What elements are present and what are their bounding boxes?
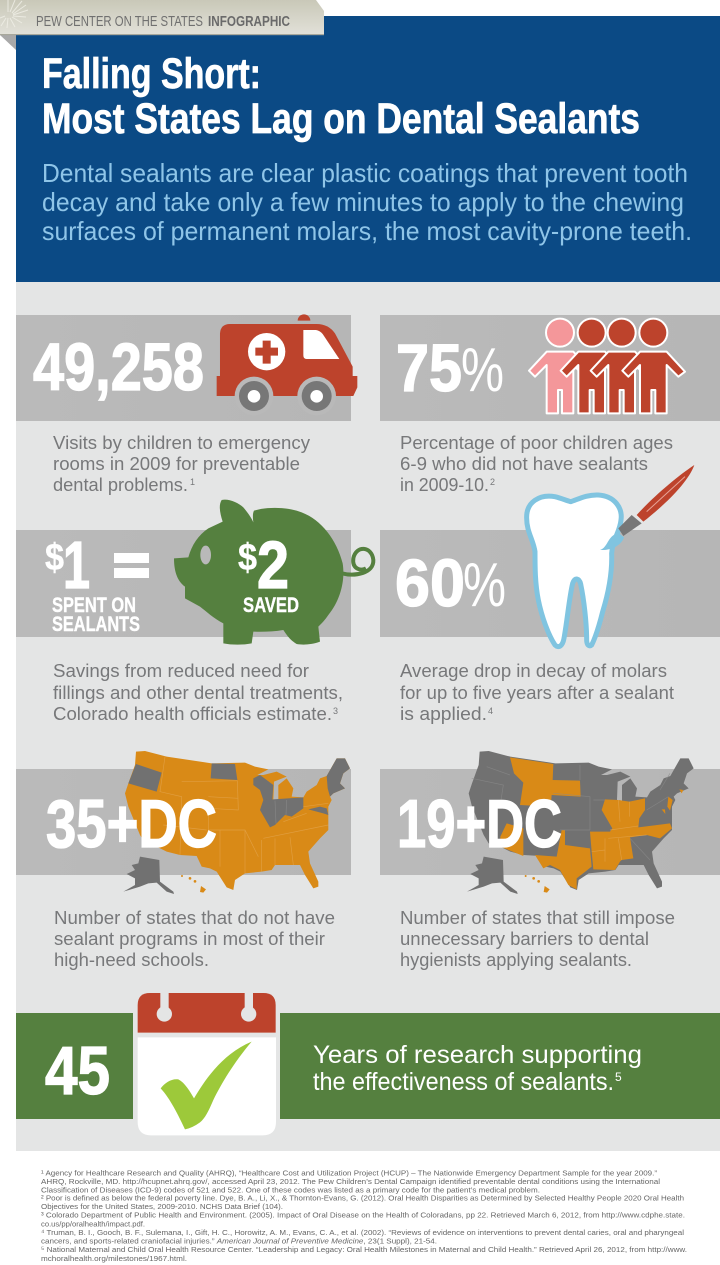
description: fillings and other dental treatments, <box>53 682 343 703</box>
stat: $1 =: SEALANTS <box>52 613 140 636</box>
statement: the effectiveness of sealants. <box>313 1068 614 1096</box>
icon: tooth and brush <box>527 465 694 647</box>
description: 3 <box>333 706 338 716</box>
stat: 49,258: 49,258 <box>33 330 204 405</box>
stat: 75%: % <box>461 336 504 405</box>
panel: decay drop <box>380 465 720 724</box>
stat: $2 saved <box>238 528 299 617</box>
grey content panel <box>16 282 720 1151</box>
panel: hygienist barriers map <box>380 751 720 970</box>
statement: 5 <box>615 1070 622 1084</box>
description: Percentage of poor children ages <box>400 432 673 453</box>
stat: 35+DC: 35+DC <box>46 786 217 862</box>
title <box>42 50 640 143</box>
description: Number of states that still impose <box>400 907 675 928</box>
footnotes <box>41 1168 687 1263</box>
icon: piggy bank <box>174 500 373 645</box>
description: unnecessary barriers to dental <box>400 928 649 949</box>
ribbon label: PEW CENTER ON THE STATES <box>36 14 203 30</box>
panel: savings <box>16 500 373 724</box>
title: Falling Short: <box>42 50 261 98</box>
stat: 75%: 75 <box>396 331 462 406</box>
description: 2 <box>490 477 495 487</box>
description: Number of states that do not have <box>54 907 335 928</box>
description: 4 <box>488 706 493 716</box>
footnotes: ³ Colorado Department of Public Health and Environment. (2005). Impact of Oral Disease on the Health of Coloradans, pp 22. Retrieved March 6, 2012, from http://www.cdphe.state. <box>41 1210 685 1220</box>
description <box>400 660 674 724</box>
description: Colorado health officials estimate. <box>53 703 332 724</box>
footnotes: AHRQ, Rockville, MD. http://hcupnet.ahrq.gov/, accessed April 23, 2012. The Pew Children’s Dental Campaign identified preventable dental conditions using the International <box>41 1177 660 1186</box>
intro text <box>42 158 692 246</box>
description <box>54 907 335 970</box>
description <box>53 660 343 724</box>
panel: years of research <box>16 993 720 1135</box>
footnotes: cancers, and sports-related craniofacial injuries.” American Journal of Preventive Medicine , 23(1 Suppl), 21-54. <box>41 1236 437 1246</box>
ribbon header <box>0 0 324 50</box>
stat: $2 saved: 2 <box>257 528 289 603</box>
stat: 19+DC: 19+DC <box>397 786 562 862</box>
description: in 2009-10. <box>400 474 489 495</box>
intro text: decay and take only a few minutes to apply to the chewing <box>42 187 684 217</box>
description: 1 <box>190 477 195 487</box>
stat: $2 saved: $ <box>238 537 257 579</box>
description: Savings from reduced need for <box>53 660 309 681</box>
description <box>400 907 675 970</box>
description: Visits by children to emergency <box>53 432 311 453</box>
stat: 60%: 60 <box>395 546 465 621</box>
description: is applied. <box>400 703 487 724</box>
stat: $1 =: $ <box>45 537 64 579</box>
panel: emergency visits <box>16 314 357 495</box>
description: sealant programs in most of their <box>54 928 325 949</box>
footnotes: ⁴ Truman, B. I., Gooch, B. F., Sulemana, I., Gift, H. C., Horowitz, A. M., Evans, C. A., et al. (2002). “Reviews of evidence on interventions to prevent dental caries, oral and pharyngeal <box>41 1228 684 1237</box>
footnotes: mchoralhealth.org/milestones/1967.html. <box>41 1254 187 1263</box>
stat: $1 =: 1 <box>63 528 90 603</box>
stat: 60%: % <box>463 551 506 620</box>
stat: 75% <box>396 331 504 406</box>
panel: sealant programs map <box>16 751 351 970</box>
description: Average drop in decay of molars <box>400 660 667 681</box>
footnotes: ² Poor is defined as below the federal poverty line. Dye, B. A., Li, X., & Thornton-Evans, G. (2012). Oral Health Disparities as Determined by Selected Healthy People 2020 Oral Health <box>41 1194 684 1202</box>
description: hygienists applying sealants. <box>400 949 632 970</box>
icon: four children <box>529 319 685 413</box>
panel: poor children without sealants <box>380 315 720 495</box>
footnotes: ¹ Agency for Healthcare Research and Quality (AHRQ), “Healthcare Cost and Utilization Project (HCUP) – The Nationwide Emergency Department Sample for the year 2009.” <box>41 1168 657 1178</box>
icon: ambulance <box>217 314 357 415</box>
map: states with barriers <box>467 751 694 894</box>
footnotes: Classification of Diseases (ICD-9) codes of 521 and 522. One of these codes was listed as a primary code for the patient’s medical problem. <box>41 1186 540 1194</box>
footnotes: Objectives for the United States, 2009-2010. NCHS Data Brief (104). <box>41 1202 283 1211</box>
footnotes: ⁵ National Maternal and Child Oral Health Resource Center. “Leadership and Legacy: Oral Health Milestones in Maternal and Child Health.” Retrieved April 26, 2012, from http://www. <box>41 1245 687 1254</box>
map: states without sealant programs <box>123 751 350 894</box>
stat: $1 = <box>45 528 149 636</box>
description: dental problems. <box>53 474 188 495</box>
stat: 45: 45 <box>45 1033 110 1109</box>
icon: sunburst <box>0 0 28 28</box>
blue header panel <box>16 16 720 282</box>
stat: 60% <box>395 546 506 621</box>
statement: Years of research supporting <box>313 1041 642 1069</box>
description: for up to five years after a sealant <box>400 682 674 703</box>
ribbon label: INFOGRAPHIC <box>208 14 290 30</box>
description: high-need schools. <box>54 949 209 970</box>
statement <box>313 1041 642 1096</box>
description: 6-9 who did not have sealants <box>400 453 648 474</box>
stat: $1 =: SPENT ON <box>52 594 136 617</box>
footnotes: co.us/pp/oralhealth/impact.pdf. <box>41 1220 145 1228</box>
description: rooms in 2009 for preventable <box>53 453 300 474</box>
description <box>53 432 311 495</box>
icon: calendar with check <box>138 993 276 1135</box>
intro text: Dental sealants are clear plastic coatings that prevent tooth <box>42 158 688 188</box>
intro text: surfaces of permanent molars, the most cavity-prone teeth. <box>42 216 692 246</box>
stat: $2 saved: SAVED <box>243 594 299 617</box>
description <box>400 432 673 495</box>
